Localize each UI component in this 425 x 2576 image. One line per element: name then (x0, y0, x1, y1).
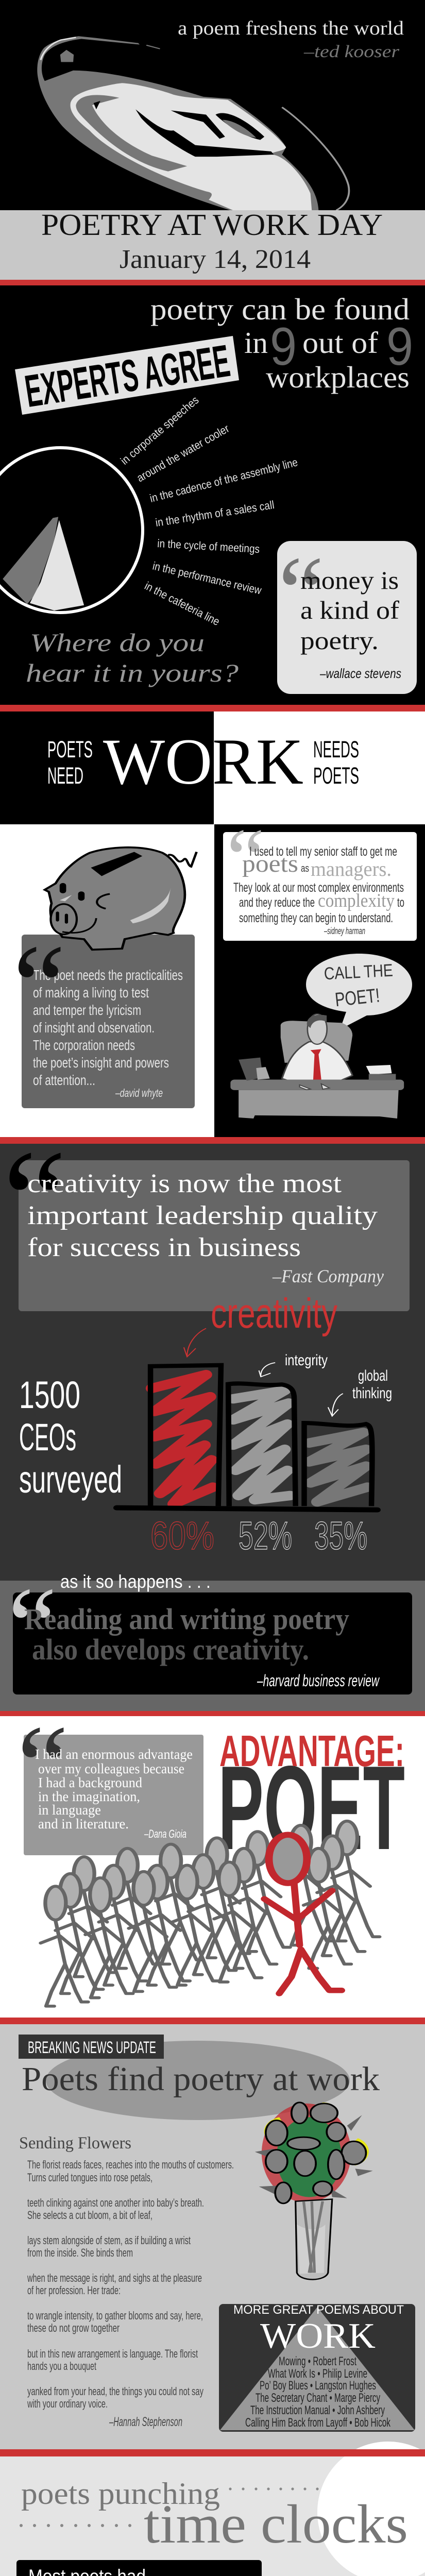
line: The corporation needs (33, 1037, 135, 1053)
figure (86, 1878, 133, 1998)
stain light centre (71, 83, 312, 210)
quote mark: “ (3, 1120, 66, 1280)
radiating list of workplaces (118, 394, 299, 628)
section background: creativity (0, 1144, 425, 1581)
poem attribution: –Hannah Stephenson (109, 2415, 182, 2429)
label: global: global (358, 1367, 388, 1384)
paper stack (366, 1065, 392, 1074)
attribution: –Fast Company (272, 1266, 384, 1286)
dotted leader 1 (229, 2487, 319, 2490)
quote: a poem freshens the world: a poem freshens the world (178, 18, 404, 39)
bar fill creativity (152, 1375, 213, 1504)
panel box (16, 2560, 262, 2576)
figure (129, 1872, 176, 1991)
label: thinking: thinking (352, 1385, 392, 1402)
label: poets: POETS (47, 736, 93, 762)
dot (33, 2524, 36, 2527)
banner plate (15, 336, 239, 415)
date: January 14, 2014 (120, 245, 311, 274)
emphasised complexity: complexity (318, 890, 395, 911)
dot (291, 2487, 294, 2490)
item: around the water cooler (134, 422, 231, 484)
numeral nine: 9 (270, 317, 297, 377)
face (308, 1014, 327, 1044)
lines: The poet needs the practicalities (33, 967, 183, 983)
bar fill integrity (233, 1391, 290, 1500)
figure (41, 1886, 88, 2006)
section background: intro (0, 0, 425, 705)
stain rim highlight (41, 38, 76, 60)
label: need: NEED (47, 762, 83, 789)
stems (303, 2201, 322, 2273)
attribution: ted kooser: –ted kooser (303, 42, 400, 61)
emphasised managers: managers. (311, 857, 392, 880)
dot (47, 2524, 50, 2527)
figure (286, 1825, 333, 1945)
pie grey slice (3, 517, 58, 604)
quote panel: sidney harman (223, 811, 417, 941)
quote line 1: money is (300, 566, 399, 595)
item: in the cafeteria line (143, 579, 222, 628)
stain top fleck (146, 45, 160, 49)
pig slot (91, 852, 142, 876)
dot (20, 2524, 23, 2527)
panel heading: MORE GREAT POEMS ABOUT (233, 2303, 404, 2317)
heading: poets punching: poets punching (21, 2477, 220, 2511)
divider red (0, 705, 425, 711)
heading: poets find poetry at work: Poets find poetry at work (22, 2060, 380, 2098)
stat word: surveyed (19, 1458, 122, 1501)
panel (22, 935, 195, 1108)
poem line: yanked from your head, the things you could not say (27, 2385, 203, 2398)
panel: whyte white background (0, 824, 214, 1137)
quote panel: fast company (3, 1120, 410, 1311)
line 1: Where do you (30, 628, 205, 657)
emphasised poets: poets (242, 850, 298, 877)
bloom (342, 2141, 366, 2164)
label: integrity: integrity (285, 1352, 328, 1369)
figure (56, 1874, 103, 1993)
line: of insight and observation. (33, 1020, 155, 1036)
attribution: –wallace stevens (319, 666, 401, 681)
illustration: executive at desk (230, 1014, 404, 1118)
poem line: to wrangle intensity, to gather blooms and say, here, (27, 2309, 203, 2322)
arrow global thinking (328, 1394, 343, 1416)
quote mark: “ (8, 1564, 57, 1687)
line 2: hear it in yours? (26, 658, 239, 687)
phone (239, 1058, 263, 1081)
line: over my colleagues because (38, 1761, 184, 1776)
bubble (306, 954, 412, 1029)
chair (281, 1021, 352, 1063)
phone handset (256, 1067, 270, 1080)
divider red (0, 2018, 425, 2024)
stain swirl (76, 95, 187, 172)
dot (74, 2524, 77, 2527)
poem item: Mowing • Robert Frost (279, 2354, 356, 2368)
poem line: lays stem alongside of stem, as if building a wrist (27, 2234, 191, 2247)
foliage green (277, 2117, 342, 2197)
word as: as (301, 863, 309, 874)
stain right ring (282, 107, 349, 210)
stain grey hollow (223, 120, 256, 138)
poem line: but in this new arrangement is language. The florist (27, 2347, 198, 2360)
leaves (255, 2115, 373, 2198)
vase (296, 2199, 332, 2280)
line 1: poetry can be found (150, 292, 410, 326)
dot (101, 2524, 104, 2527)
title band (0, 210, 425, 280)
tie (311, 1049, 321, 1081)
illustration: poem stain on the page (37, 36, 349, 210)
line: in the imagination, (38, 1789, 140, 1804)
bloom (328, 2150, 344, 2179)
pig highlight (60, 888, 171, 923)
pig ear (97, 894, 110, 909)
section background: time clocks (0, 2449, 425, 2576)
panel (223, 832, 417, 941)
poem line: with your ordinary voice. (27, 2397, 108, 2410)
quote panel: dana gioia (17, 1701, 203, 1855)
circle with pie illustration (0, 448, 143, 613)
line: Reading and writing poetry (24, 1602, 349, 1636)
line: in language (38, 1802, 101, 1818)
poem item: What Work Is • Philip Levine (268, 2367, 367, 2381)
poem line: when the message is right, and sighs at the pleasure (27, 2272, 202, 2284)
poem line: The florist reads faces, reaches into the mouths of customers. (27, 2158, 234, 2171)
section background: advantage (0, 1716, 425, 2018)
poem line: Turns curled tongues into rose petals, (27, 2171, 152, 2184)
poem title: Sending Flowers (19, 2134, 131, 2153)
line 3: workplaces (266, 360, 410, 394)
bubble text 1: CALL THE (324, 961, 394, 984)
tag: breaking news update (19, 2035, 164, 2059)
tag box (19, 2035, 164, 2059)
line: I had an enormous advantage (35, 1747, 193, 1762)
circle outline (0, 448, 143, 613)
divider red (0, 2449, 425, 2456)
item: in the performance review (151, 560, 263, 597)
bar fill global thinking (309, 1432, 367, 1502)
dot (115, 2524, 118, 2527)
banner text: EXPERTS AGREE (22, 335, 233, 417)
bar outline creativity (150, 1365, 221, 1506)
label: needs: NEEDS (313, 736, 359, 762)
line: and temper the lyricism (33, 1002, 141, 1018)
hair (307, 1015, 327, 1028)
line: of attention... (33, 1072, 95, 1088)
blooms (266, 2103, 366, 2204)
figure (156, 1844, 203, 1964)
line: of making a living to test (33, 985, 149, 1001)
line: creativity is now the most (27, 1169, 342, 1198)
label: as it so happens: as it so happens . . . (60, 1571, 211, 1592)
figure (229, 1849, 277, 1968)
bubble text 2: POET! (334, 985, 381, 1011)
poem: sending flowers (19, 2134, 234, 2429)
figure (214, 1862, 262, 1982)
bloom (287, 2137, 320, 2150)
attribution: –david whyte (115, 1087, 163, 1099)
yellow blooms (264, 2103, 369, 2165)
panel: poets need work black half (0, 711, 214, 824)
panel (24, 1735, 203, 1855)
book stack (369, 1074, 396, 1080)
panel: work needs poets white half (214, 711, 425, 824)
panel: harman black background (214, 824, 425, 1137)
line: important leadership quality (27, 1201, 378, 1230)
numeral nine second: 9 (386, 317, 413, 377)
panel (277, 541, 417, 694)
label: creativity: creativity (211, 1290, 337, 1337)
item: in the rhythm of a sales call (155, 498, 275, 529)
poem line: of her profession. Her trade: (27, 2284, 121, 2297)
arrow creativity (184, 1328, 206, 1357)
bloom (313, 2181, 332, 2196)
poem line: teeth clinking against one another into baby’s breath. (27, 2196, 204, 2209)
pie white slice (30, 520, 84, 611)
illustration: flowers in a vase (255, 2103, 373, 2280)
bloom (327, 2123, 346, 2141)
backdrop ellipse (46, 2041, 350, 2120)
pig tail (168, 852, 197, 867)
heading: work split (103, 740, 303, 785)
line: I had a background (38, 1775, 142, 1790)
line: and they reduce the (239, 895, 315, 910)
poem line: these do not grow together (27, 2321, 120, 2334)
value: 60 percent: 60% (150, 1514, 214, 1558)
quote panel: wallace stevens (277, 536, 417, 694)
dot (60, 2524, 63, 2527)
dot (229, 2487, 232, 2490)
figure (142, 1865, 190, 1985)
dot (267, 2487, 270, 2490)
arrow integrity (259, 1363, 275, 1377)
divider red (0, 1711, 425, 1716)
bar chart: creativity integrity global thinking (116, 1328, 378, 1510)
pig snout (50, 904, 77, 935)
quote panel: harvard business review (8, 1564, 412, 1694)
panel (19, 1160, 410, 1311)
tag text: BREAKING NEWS UPDATE (28, 2038, 156, 2057)
figure (243, 1832, 290, 1952)
quote mark: “ (17, 1701, 69, 1830)
dot (303, 2487, 307, 2490)
illustration: crowd of stick figures (41, 1821, 380, 2006)
figure (172, 1865, 219, 1985)
panel (13, 1592, 412, 1694)
line 2 out of: out of (302, 326, 378, 360)
figure (112, 1849, 160, 1968)
quote line 2: a kind of (300, 596, 399, 624)
panel heading work: WORK (260, 2316, 376, 2356)
banner: experts agree (15, 335, 239, 417)
vase water (297, 2225, 326, 2274)
pig body (45, 848, 185, 950)
heading: time clocks: time clocks (144, 2494, 408, 2555)
bloom (311, 2104, 337, 2123)
figure (189, 1855, 236, 1975)
quote mark: “ (227, 811, 264, 905)
figures back row (332, 1821, 380, 1941)
panel: more great poems about work (219, 2303, 415, 2432)
bloom (266, 2121, 287, 2146)
stat: 1500 CEOs surveyed (19, 1374, 122, 1501)
bar outline integrity (228, 1383, 296, 1506)
figure (303, 1849, 351, 1968)
quote mark black: “ (13, 920, 65, 1052)
poem line: She selects a cut bloom, a bit of leaf, (27, 2209, 152, 2222)
figure (99, 1865, 146, 1985)
stain dark folds (94, 101, 274, 157)
poem line: hands you a bouquet (27, 2360, 96, 2372)
triangle (220, 2307, 415, 2430)
bloom (266, 2150, 287, 2173)
poem line: from the inside. She binds them (27, 2246, 133, 2259)
hands (300, 1084, 329, 1090)
dotted leader 2 (20, 2524, 131, 2527)
quote panel: david whyte (22, 935, 195, 1108)
quote line 3: poetry. (300, 626, 379, 655)
red head (269, 1835, 307, 1883)
line 2 in: in (244, 326, 268, 360)
attribution: –Dana Gioia (144, 1827, 186, 1840)
label: poets: POETS (313, 762, 359, 789)
work white part: WORK (103, 726, 303, 798)
bloom (292, 2103, 308, 2124)
stain outer shape (37, 36, 318, 210)
value: 35 percent: 35% (314, 1514, 367, 1558)
callout: call the poet (306, 954, 412, 1029)
dot (279, 2487, 282, 2490)
section background: harvard (0, 1581, 425, 1711)
divider red (0, 280, 425, 285)
title: POETRY AT WORK DAY (41, 208, 383, 242)
dot (242, 2487, 245, 2490)
heading: poetry can be found (150, 292, 413, 394)
decorative clock circle (317, 2442, 425, 2576)
item: in the cadence of the assembly line (148, 455, 299, 505)
handwritten question (26, 628, 239, 687)
line: also develops creativity. (32, 1633, 309, 1666)
value: 52 percent: 52% (239, 1514, 292, 1558)
dot (128, 2524, 131, 2527)
word to: to (397, 895, 404, 910)
line: and in literature. (38, 1816, 129, 1832)
stain blob (60, 50, 74, 62)
pig nostrils (58, 913, 66, 922)
section background: breaking news (0, 2024, 425, 2449)
foliage red (262, 2104, 351, 2202)
figure (202, 1838, 249, 1958)
attribution: –sidney harman (324, 926, 365, 936)
panel: day jobs (16, 2560, 262, 2576)
bloom (294, 2151, 316, 2176)
axis (116, 1508, 378, 1510)
divider red (0, 1137, 425, 1144)
stat number: 1500 (19, 1374, 80, 1416)
pig smile (62, 918, 96, 933)
dot (316, 2487, 319, 2490)
dot (88, 2524, 91, 2527)
item: in the cycle of meetings (157, 537, 260, 555)
icon: piggy bank (45, 848, 197, 950)
figure (69, 1857, 116, 1977)
dot (254, 2487, 258, 2490)
bloom (275, 2182, 292, 2204)
desk body (239, 1090, 399, 1118)
line: for success in business (27, 1233, 301, 1262)
stat word: CEOs (19, 1416, 76, 1459)
item: in corporate speeches (118, 394, 201, 467)
pig eyes (63, 886, 81, 898)
panel box (219, 2304, 415, 2432)
bar outline global thinking (304, 1423, 372, 1506)
work black part: WORK (103, 726, 303, 798)
line: the poet’s insight and powers (33, 1055, 169, 1071)
red body (264, 1884, 342, 1993)
desk top (230, 1080, 404, 1090)
quote mark: “ (278, 536, 324, 650)
red poet figure (264, 1835, 342, 1993)
shirt (282, 1042, 352, 1086)
figure (317, 1836, 365, 1956)
